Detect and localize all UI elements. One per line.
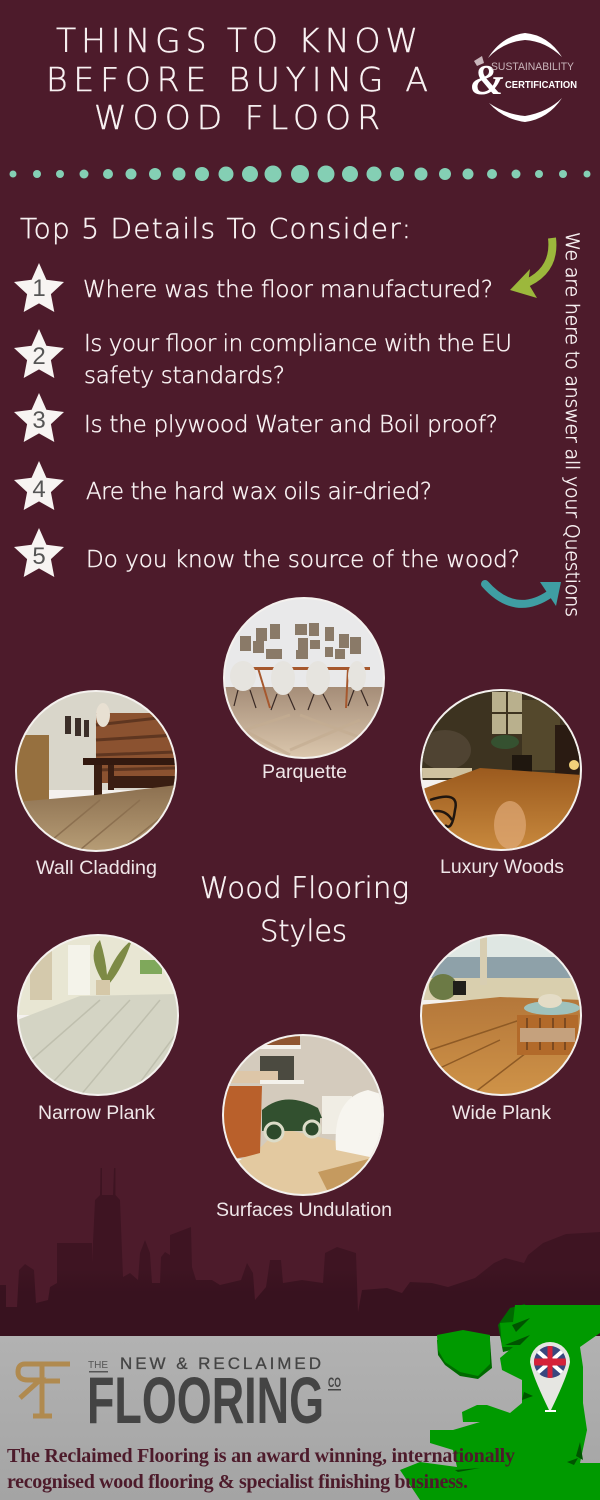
heading: wood flooring styles: [200, 871, 409, 948]
heading: wood flooring styles: Styles: [260, 914, 347, 948]
item 4: [14, 461, 432, 510]
item 2: Is your floor in compliance with the EU: [84, 331, 512, 357]
title: BEFORE BUYING A: [46, 60, 428, 99]
arrow: teal: [485, 582, 561, 606]
item 1: Where was the floor manufactured?: [83, 277, 493, 303]
label: luxury woods: Luxury Woods: [440, 857, 564, 878]
item 1: 1: [32, 275, 46, 302]
photo: wall cladding: [15, 690, 177, 852]
badge: sustainability certification: &: [471, 58, 504, 104]
map pin: [530, 1342, 570, 1412]
badge: sustainability certification: CERTIFICATION: [505, 80, 577, 91]
badge: sustainability certification: SUSTAINABILITY: [491, 61, 575, 73]
item 5: 5: [32, 543, 46, 570]
label: narrow plank: Narrow Plank: [38, 1103, 156, 1124]
label: wall cladding: Wall Cladding: [36, 858, 157, 879]
badge: sustainability certification: [471, 33, 577, 122]
label: wide plank: Wide Plank: [452, 1103, 551, 1124]
footer description: [7, 1445, 515, 1493]
logo: new and reclaimed flooring: CO: [328, 1374, 341, 1390]
logo: new and reclaimed flooring: [18, 1354, 341, 1437]
photo: luxury woods: [419, 689, 582, 852]
item 2: 2: [32, 343, 46, 370]
photo: wide plank: [420, 934, 582, 1096]
photo: narrow plank: [17, 934, 179, 1096]
map: united kingdom: [400, 1304, 600, 1500]
item 4: 4: [32, 476, 46, 503]
footer description: The Reclaimed Flooring is an award winning, internationally: [7, 1445, 515, 1467]
footer description: recognised wood flooring & specialist finishing business.: [7, 1471, 468, 1493]
checklist: [14, 263, 520, 577]
logo mark: [18, 1364, 70, 1416]
item 2: [14, 329, 512, 389]
skyline silhouette: [0, 1168, 600, 1336]
item 5: Do you know the source of the wood?: [86, 547, 520, 573]
logo: new and reclaimed flooring: FLOORING: [87, 1363, 324, 1437]
item 2: safety standards?: [84, 363, 285, 389]
photo: parquette: [223, 597, 385, 759]
dotted divider: [10, 165, 590, 183]
item 3: Is the plywood Water and Boil proof?: [84, 412, 498, 438]
logo: new and reclaimed flooring: THE: [88, 1360, 108, 1371]
heading: top 5 details: Top 5 Details To Consider:: [20, 212, 411, 245]
heading: wood flooring styles: Wood Flooring: [200, 871, 409, 905]
item 3: [14, 393, 498, 442]
logo: new and reclaimed flooring: NEW & RECLAIMED: [120, 1354, 321, 1373]
title: WOOD FLOOR: [94, 98, 380, 137]
footer band: [0, 1336, 600, 1500]
title: THINGS TO KNOW: [56, 21, 418, 60]
label: surfaces undulation: Surfaces Undulation: [216, 1200, 392, 1221]
item 3: 3: [32, 407, 46, 434]
photo: surfaces undulation: [222, 1034, 384, 1196]
arrow: green: [510, 238, 552, 298]
title: [46, 21, 428, 137]
label: parquette: Parquette: [262, 762, 347, 783]
item 4: Are the hard wax oils air-dried?: [86, 479, 432, 505]
vertical side note: We are here to answer all your Questions: [561, 232, 583, 617]
item 1: [14, 263, 493, 312]
item 5: [14, 528, 520, 577]
